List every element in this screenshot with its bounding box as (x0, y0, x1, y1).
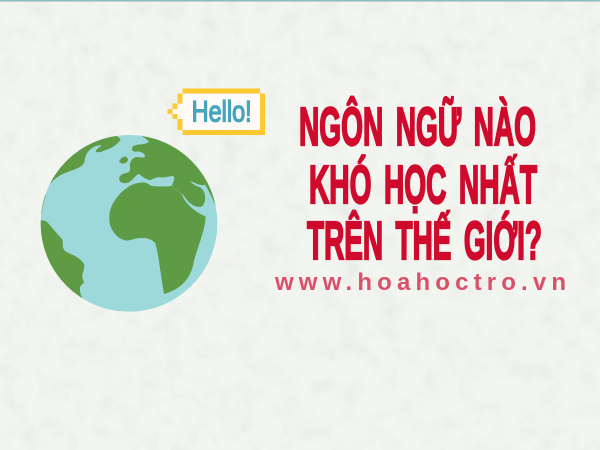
title (299, 96, 542, 271)
icon: earth globe (37, 130, 227, 312)
hello label: Hello! (192, 96, 252, 129)
website url: www.hoahoctro.vn (274, 269, 566, 296)
icon: Hello speech bubble (167, 88, 265, 135)
